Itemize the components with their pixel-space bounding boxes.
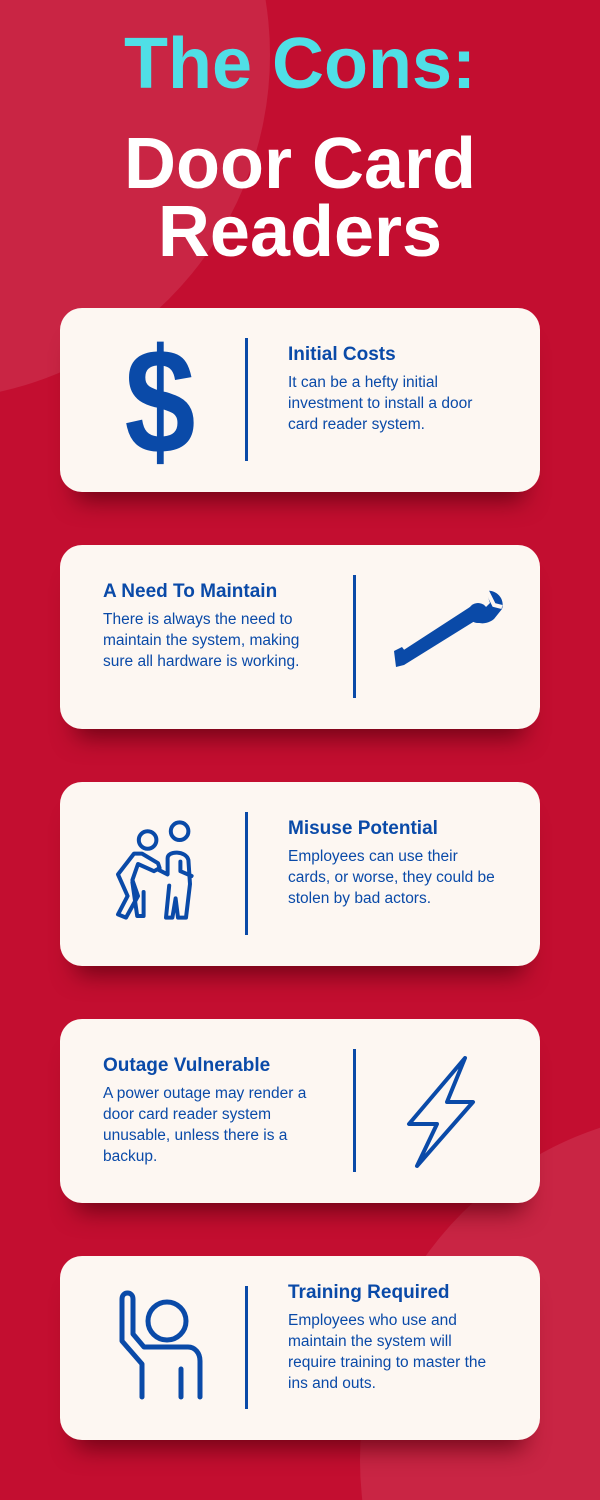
text: maintain: maintain the system, making [103,632,299,649]
icon: wrench [394,590,503,667]
text: maintain: sure all hardware is working. [103,653,299,670]
text: training: Training Required [288,1282,450,1303]
text: outage: Outage Vulnerable [103,1055,270,1076]
text: initial costs: It can be a hefty initial [288,374,438,391]
panel: misuse [60,782,540,966]
text: training [288,1282,486,1392]
icon: lightning [406,1056,476,1168]
panel: initial costs [60,308,540,492]
icon: raised hand person [120,1290,202,1400]
text: training: ins and outs. [288,1375,376,1392]
text: misuse: Misuse Potential [288,818,438,839]
text: outage: door card reader system [103,1106,271,1123]
text: outage: A power outage may render a [103,1085,306,1102]
text: training: require training to master the [288,1354,486,1371]
text: maintain: There is always the need to [103,611,293,628]
panel: training [60,1256,540,1440]
text: outage: unusable, unless there is a [103,1127,287,1144]
text: initial costs: Initial Costs [288,344,396,365]
text: initial costs [288,344,472,433]
title: Readers [158,192,442,272]
title: The Cons: [124,24,476,104]
text: training: Employees who use and [288,1312,457,1329]
text: misuse [288,818,495,907]
text: maintain [103,581,299,670]
text: outage: backup. [103,1148,157,1165]
icon: thief [116,820,194,920]
panel: maintain [60,545,540,729]
title: Door Card [124,124,476,204]
title [124,24,476,272]
icon: dollar: $ [125,317,195,485]
text: training: maintain the system will [288,1333,452,1350]
text: misuse: Employees can use their [288,848,458,865]
text: misuse: cards, or worse, they could be [288,869,495,886]
text: initial costs: investment to install a door [288,395,472,412]
text: outage [103,1055,306,1165]
panel: outage [60,1019,540,1203]
text: maintain: A Need To Maintain [103,581,277,602]
text: initial costs: card reader system. [288,416,425,433]
text: misuse: stolen by bad actors. [288,890,431,907]
